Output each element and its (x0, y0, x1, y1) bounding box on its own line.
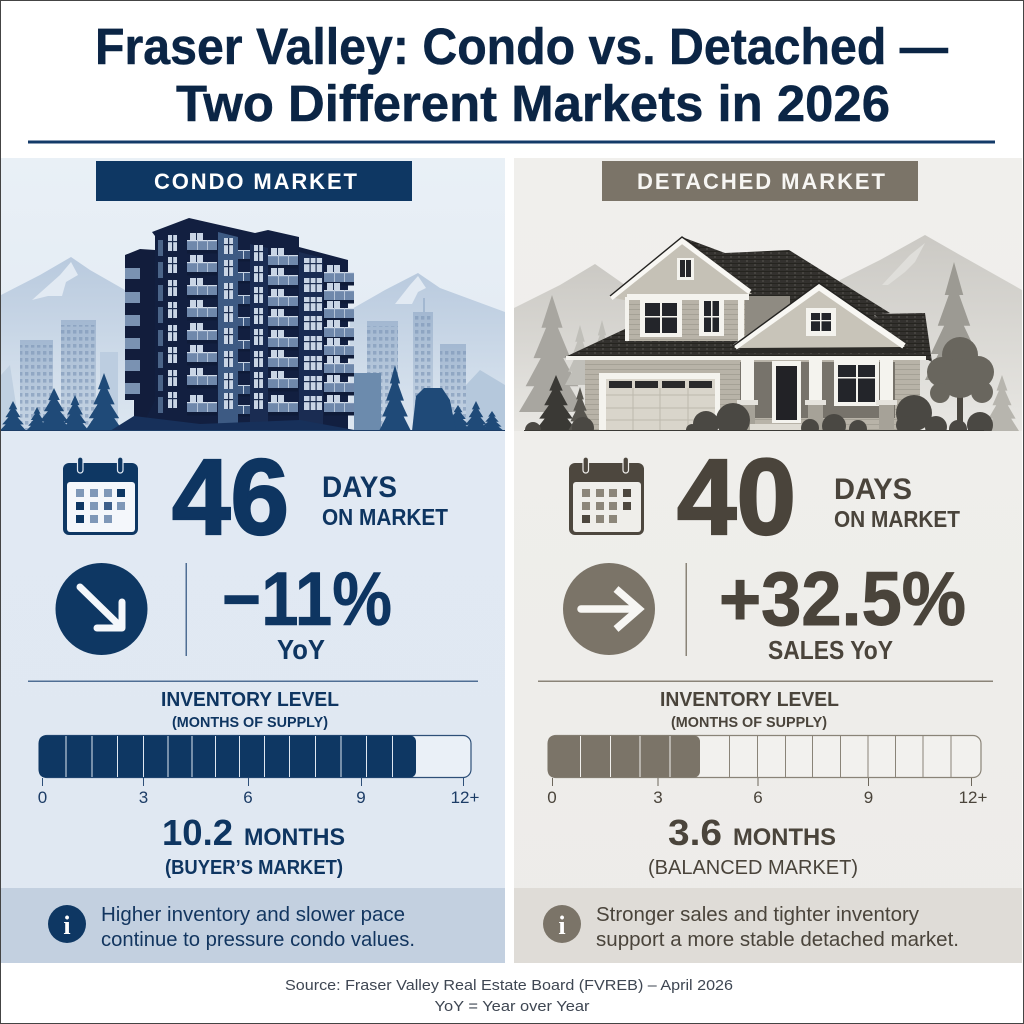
inventory heading (161, 689, 339, 731)
background trees (519, 295, 585, 412)
callout: condo note: i (63, 911, 71, 940)
callout: condo note: Higher inventory and slower pace (101, 903, 405, 926)
inventory value: 3.6 months: MONTHS (733, 824, 836, 851)
right gable (734, 290, 905, 348)
sales year over year: +32.5%: SALES YoY (768, 635, 893, 665)
background towers (20, 340, 53, 431)
inventory bar chart: 3 (139, 788, 148, 807)
days on market: 40: ON MARKET (834, 506, 960, 532)
days on market: 46: DAYS (322, 471, 397, 504)
source footer: YoY = Year over Year (434, 998, 590, 1015)
inventory value: 3.6 months: (BALANCED MARKET) (648, 857, 858, 879)
panel: detached market (514, 158, 1022, 963)
inventory heading: INVENTORY LEVEL (161, 689, 339, 711)
days on market: 40 (677, 436, 960, 557)
callout: condo note: continue to pressure condo values. (101, 928, 415, 951)
days on market: 46: 46 (172, 436, 289, 557)
title (95, 18, 948, 132)
lower wall (585, 360, 920, 431)
year over year: -11%: −11% (222, 557, 392, 642)
callout: detached note (514, 888, 1022, 963)
house (565, 237, 932, 431)
title rule (28, 140, 995, 144)
detached header (602, 161, 918, 201)
inventory bar chart: 3 (653, 788, 663, 807)
inventory value: 10.2 months (162, 812, 345, 879)
inventory heading (660, 689, 839, 731)
inventory value: 10.2 months: (BUYER’S MARKET) (165, 857, 343, 879)
icon: down arrow (56, 563, 148, 655)
detached header: DETACHED MARKET (637, 169, 886, 194)
condo header: CONDO MARKET (154, 169, 358, 194)
inventory bar chart: 12+ (451, 788, 479, 807)
callout: detached note: support a more stable detached market. (596, 928, 959, 951)
panel: condo market (0, 158, 505, 963)
inventory value: 3.6 months: 3.6 (668, 812, 722, 853)
days on market: 46: ON MARKET (322, 504, 448, 530)
mountains (1, 257, 134, 415)
right gable window (806, 308, 836, 336)
inventory heading: (MONTHS OF SUPPLY) (671, 714, 827, 731)
icon: right arrow (563, 563, 655, 655)
inventory bar chart (38, 736, 479, 807)
porch door (772, 361, 801, 423)
inventory heading: (MONTHS OF SUPPLY) (172, 714, 328, 731)
days on market: 40: 40 (677, 436, 796, 557)
upper gable window (677, 258, 694, 280)
inventory bar chart: 12+ (959, 788, 987, 807)
title: Fraser Valley: Condo vs. Detached — (95, 18, 948, 75)
icon: calendar (63, 457, 138, 535)
upper wall (625, 297, 745, 341)
inventory bar chart: 0 (547, 788, 557, 807)
condo skyline illustration (0, 218, 505, 432)
mountains (514, 264, 625, 430)
columns (741, 360, 754, 400)
upper windows (640, 298, 682, 337)
detached house illustration (514, 235, 1022, 439)
upper gable (610, 237, 752, 300)
title: Two Different Markets in 2026 (176, 75, 890, 132)
inventory value: 10.2 months: 10.2 (162, 812, 233, 853)
inventory value: 3.6 months (648, 812, 858, 879)
inventory bar chart: 6 (243, 788, 253, 807)
inventory bar chart (547, 736, 987, 807)
source footer (285, 977, 733, 1015)
inventory value: 10.2 months: MONTHS (244, 824, 345, 851)
year over year: -11%: YoY (277, 634, 325, 665)
detached panel background (514, 158, 1022, 963)
days on market: 46 (172, 436, 448, 557)
callout: condo note (1, 888, 505, 963)
inventory bar chart: 6 (753, 788, 763, 807)
shrubs (525, 395, 993, 431)
dark foreground tree (539, 375, 572, 430)
callout: detached note: Stronger sales and tighter inventory (596, 903, 920, 926)
inventory bar chart: 0 (38, 788, 47, 807)
days on market: 40: DAYS (834, 473, 912, 506)
condo building (110, 218, 360, 431)
source footer: Source: Fraser Valley Real Estate Board (FVREB) – April 2026 (285, 977, 733, 994)
round tree (957, 398, 963, 422)
condo header (96, 161, 412, 201)
porch window (834, 360, 879, 406)
main roof (725, 250, 930, 360)
inventory bar chart: 9 (356, 788, 366, 807)
tree line (0, 365, 504, 431)
condo panel background (1, 158, 505, 963)
garage (599, 373, 720, 431)
icon: calendar (569, 457, 644, 535)
inventory bar chart: 9 (864, 788, 873, 807)
lower left roof (565, 329, 745, 357)
sales year over year: +32.5%: +32.5% (719, 557, 966, 642)
inventory heading: INVENTORY LEVEL (660, 689, 839, 711)
callout: detached note: i (558, 911, 566, 940)
